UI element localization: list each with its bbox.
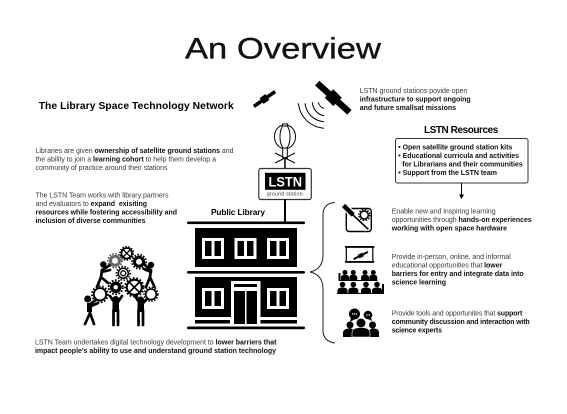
heading: LSTN Resources: LSTN Resources	[424, 125, 499, 136]
text block: hands-on: opportunities through hands-on experiences	[392, 217, 532, 224]
text block: community: Provide tools and opportunites that support	[392, 310, 523, 318]
icon: signal waves	[298, 102, 324, 128]
people	[85, 262, 154, 325]
text block: infrastructure: LSTN ground stations povide open	[360, 88, 467, 95]
text block: digital technology	[35, 340, 277, 355]
ground station sign: ground station	[267, 192, 303, 198]
text block: ownership	[36, 148, 234, 172]
text block: educational	[392, 254, 524, 286]
text block: community	[392, 310, 530, 334]
text block: community: community discussion and interaction with	[392, 319, 530, 326]
ground station sign	[259, 168, 311, 200]
text block: partners	[36, 192, 177, 225]
title: An Overview	[185, 32, 381, 66]
text block: infrastructure: and future smallsat missions	[360, 105, 456, 112]
text block: partners: and evaluators to expand exisiting	[36, 201, 147, 208]
text block: educational: science learning	[392, 280, 446, 286]
heading: network name: The Library Space Technology Network	[39, 101, 234, 112]
panel: resources list: • Educational curricula and activities	[398, 153, 519, 160]
door	[231, 281, 260, 324]
panel: resources list: • Support from the LSTN team	[398, 170, 497, 177]
panel: resources list	[396, 138, 528, 183]
text block: partners: inclusion of diverse communities	[36, 218, 146, 225]
illustration: people assembling gears	[85, 247, 158, 325]
text block: partners: The LSTN Team works with library partners	[36, 192, 169, 200]
text block: ownership: the ability to join a learning cohort to help them develop a	[36, 156, 216, 164]
text block: educational: educational opportunities that lower	[392, 262, 503, 270]
text block: community: science experts	[392, 328, 442, 334]
text block: hands-on: Enable new and inspiring learning	[392, 208, 496, 216]
panel: resources list: for Librarians and their communities	[402, 162, 523, 168]
icon: antenna	[274, 124, 296, 168]
icon: classroom	[337, 246, 384, 294]
icon: tools and gear	[343, 205, 371, 232]
text block: hands-on: working with open space hardware	[391, 226, 507, 232]
lower windows	[202, 288, 289, 309]
arrow: resources to benefits	[459, 183, 464, 199]
icon: community discussion	[343, 308, 379, 337]
ground station sign: LSTN	[268, 174, 302, 190]
building: public library	[187, 200, 305, 329]
icon: large satellite	[313, 78, 354, 117]
text block: digital technology: LSTN Team undertakes digital technology development to lower barriers that	[35, 340, 277, 346]
text block: partners: resources while fostering accessibility and	[36, 210, 177, 216]
text block: hands-on	[391, 208, 532, 232]
text block: infrastructure: infrastructure to support ongoing	[360, 96, 471, 104]
text block: educational: Provide in-person, online, and informal	[392, 254, 511, 261]
upper windows	[202, 238, 289, 259]
heading: Public Library: Public Library	[211, 207, 265, 217]
text block: educational: barriers for entry and integrate data into	[392, 271, 524, 278]
text block: digital technology: impact people's ability to use and understand ground station technology	[35, 348, 276, 355]
text block: ownership: Libraries are given ownership of satellite ground stations and	[36, 148, 234, 155]
icon: small satellite	[252, 89, 277, 109]
panel: resources list: • Open satellite ground station kits	[398, 144, 512, 152]
text block: ownership: community of practice around their stations	[36, 165, 168, 172]
text block: infrastructure	[360, 88, 471, 112]
gears	[92, 247, 158, 302]
brace	[310, 202, 335, 343]
